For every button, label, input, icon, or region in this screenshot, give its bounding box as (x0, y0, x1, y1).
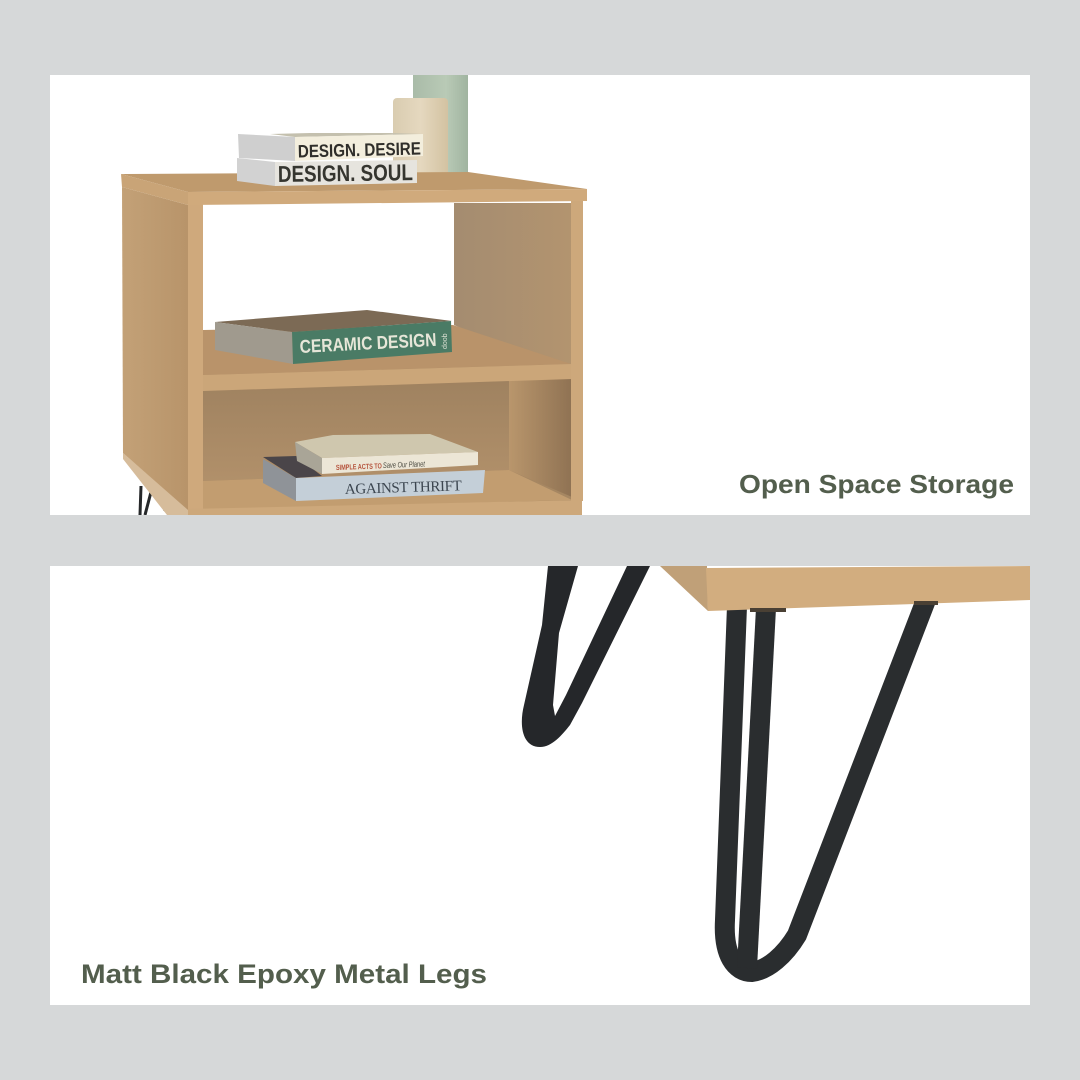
label: matt black epoxy metal legs: Matt Black Epoxy Metal Legs (81, 959, 487, 989)
icon: front hairpin leg (725, 600, 926, 972)
table corner (660, 566, 1030, 612)
icon: ceramic design book (215, 310, 452, 364)
icon: lower books: AGAINST THRIFT (345, 478, 462, 498)
icon: ceramic design book: CERAMIC DESIGN (299, 329, 437, 357)
icon: lower books (263, 434, 485, 501)
icon: vase and candle (393, 75, 468, 172)
icon: lower books: Save Our Planet (383, 460, 426, 470)
nightstand (121, 172, 587, 515)
label: open space storage: Open Space Storage (739, 469, 1014, 499)
icon: lower books: SIMPLE ACTS TO (336, 461, 382, 472)
icon: rear hairpin leg (522, 566, 650, 747)
icon: ceramic design book: doob (442, 333, 449, 349)
icon: stacked books on top (237, 133, 423, 187)
icon: hairpin legs small (138, 486, 164, 515)
panel: matt black legs (50, 566, 1030, 1005)
icon: stacked books on top: DESIGN. DESIRE (298, 138, 421, 161)
icon: stacked books on top: DESIGN. SOUL (278, 159, 413, 187)
panel: open space storage (50, 70, 1030, 516)
